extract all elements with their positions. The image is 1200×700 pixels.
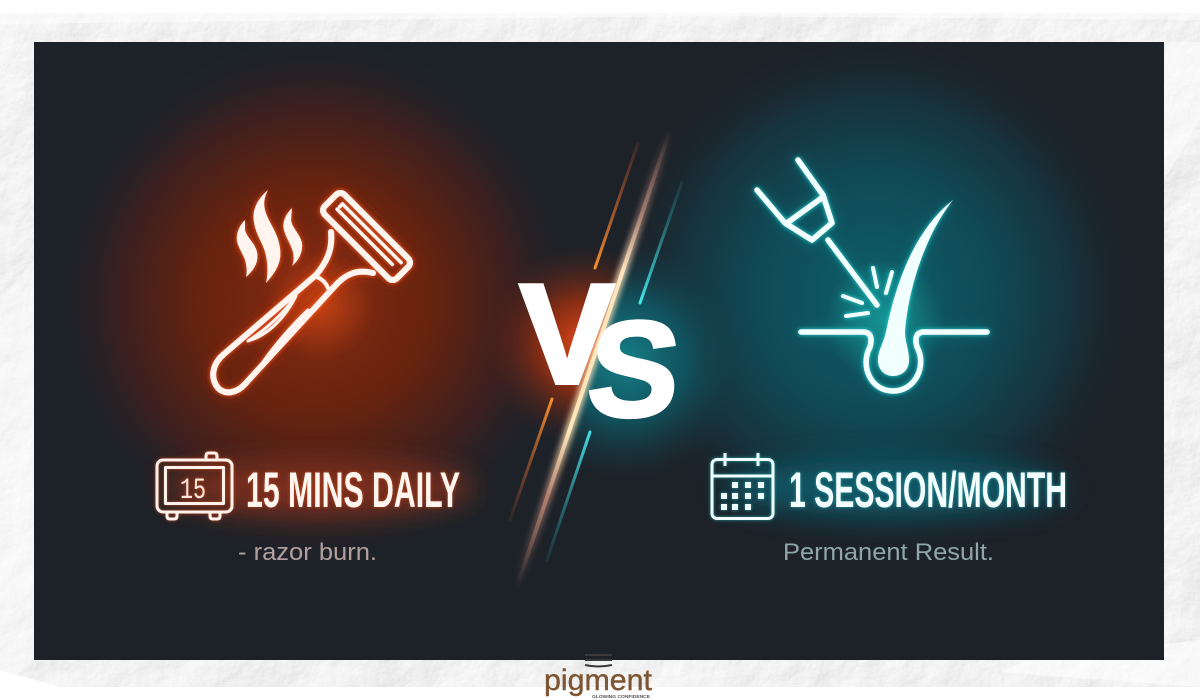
timer digits: 15 bbox=[180, 474, 206, 508]
logo mark bbox=[585, 655, 612, 666]
hair bbox=[878, 200, 953, 376]
icon: razor with heat waves bbox=[213, 190, 412, 392]
laser head bbox=[757, 160, 832, 240]
heat waves bbox=[237, 190, 302, 283]
divider: diagonal light streaks bbox=[510, 130, 682, 587]
icon: calendar bbox=[712, 453, 773, 518]
laser beam bbox=[828, 240, 877, 305]
icon: digital timer bbox=[157, 453, 232, 519]
text: razor burn: - razor burn. bbox=[238, 539, 377, 566]
razor head bbox=[321, 191, 412, 282]
logo tagline: GLOWING CONFIDENCE bbox=[592, 694, 650, 699]
calendar dots bbox=[721, 482, 764, 510]
heading: 15 mins daily: 15 MINS DAILY bbox=[246, 462, 460, 518]
heading: VS: V bbox=[520, 255, 614, 414]
sparks bbox=[843, 268, 892, 316]
icon: laser hitting hair follicle bbox=[757, 160, 987, 391]
heading: VS bbox=[518, 283, 676, 420]
heading: VS: S bbox=[582, 293, 686, 445]
logo wordmark: pigment bbox=[544, 664, 653, 697]
skin line and follicle bbox=[801, 332, 987, 391]
razor handle bbox=[213, 232, 373, 392]
text: permanent result: Permanent Result. bbox=[783, 539, 994, 566]
logo: pigment bbox=[544, 655, 653, 699]
